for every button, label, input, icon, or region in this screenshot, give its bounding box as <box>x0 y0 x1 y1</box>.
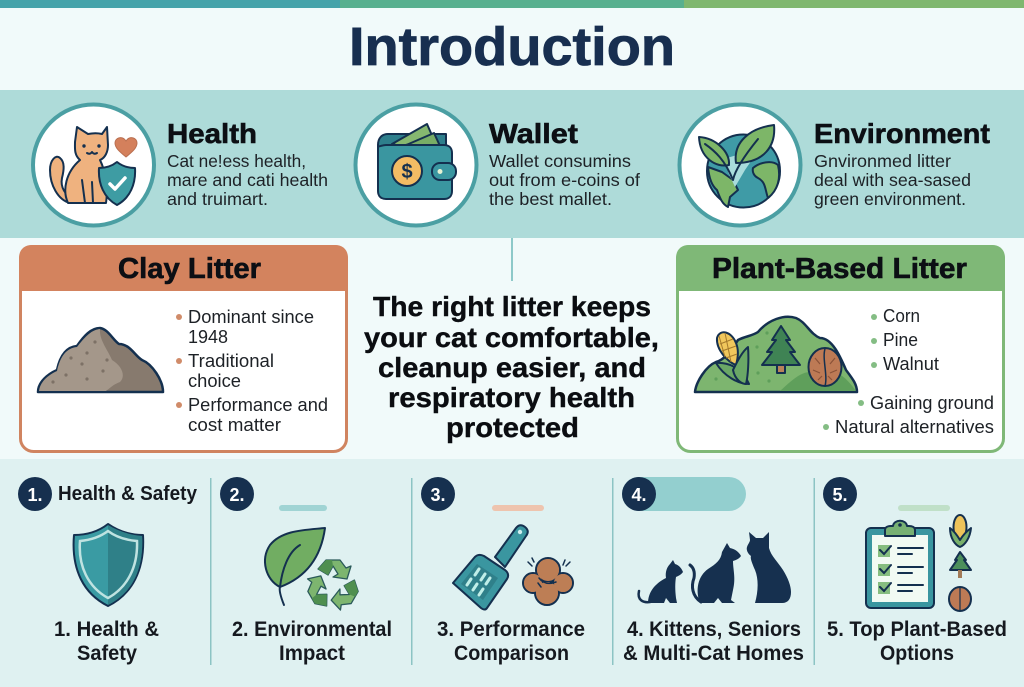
connector line <box>511 238 513 281</box>
criterion 2: environmental impact <box>220 477 392 665</box>
criterion 1: health and safety: Health & Safety <box>58 483 198 505</box>
title: Introduction <box>349 17 675 77</box>
heading: Health: Health <box>167 118 257 149</box>
heading: Environment: Environment <box>814 118 990 149</box>
text: Wallet description: the best mallet. <box>489 189 612 209</box>
text: Health description: and truimart. <box>167 189 268 209</box>
list: clay points: choice <box>188 370 241 391</box>
text: Environment description: deal with sea-sased <box>814 170 971 190</box>
icon: plant mound with corn, pine, walnut <box>695 317 857 392</box>
panel: plant-based litter <box>676 245 1005 452</box>
criterion 4: kittens, seniors and multi-cat homes <box>622 477 804 665</box>
criterion 1: health and safety: 1. <box>27 485 43 505</box>
top colour bar <box>0 0 1024 8</box>
criterion 1: health and safety: Safety <box>77 641 137 665</box>
icon: wallet with coin <box>356 104 476 226</box>
criterion 3: performance comparison <box>421 477 585 665</box>
criterion 2: environmental impact: Impact <box>279 641 345 665</box>
panel: three concerns band <box>0 90 1024 238</box>
callout: central message: respiratory health <box>388 382 635 413</box>
heading: Plant-Based Litter: Plant-Based Litter <box>712 253 967 285</box>
list: clay points: Performance and <box>188 394 328 415</box>
criterion 3: performance comparison: 3. <box>430 485 446 505</box>
criterion 5: top plant-based options: 5. Top Plant-Based <box>827 617 1007 641</box>
text: Environment description: Gnvironmed litter <box>814 151 951 171</box>
text: Health description: mare and cati health <box>167 170 328 190</box>
text: Wallet description <box>489 151 640 209</box>
criterion 2: environmental impact: 2. Environmental <box>232 617 392 641</box>
criterion 1: health and safety <box>18 477 198 665</box>
criterion 1: health and safety: 1. Health & <box>54 617 159 641</box>
callout: central message: cleanup easier, and <box>378 352 646 383</box>
text: Wallet description: out from e-coins of <box>489 170 640 190</box>
text: Environment description <box>814 151 971 209</box>
text: Health description: Cat ne!ess health, <box>167 151 306 171</box>
criterion 4: kittens, seniors and multi-cat homes: & Multi-Cat Homes <box>623 641 804 665</box>
list: plant points: Pine <box>883 329 918 350</box>
criterion 5: top plant-based options <box>823 477 1007 665</box>
list: plant points: Gaining ground <box>870 392 994 413</box>
list: clay points: 1948 <box>188 326 228 347</box>
panel: five criteria <box>0 459 1024 687</box>
list: clay points: Dominant since <box>188 306 314 327</box>
panel: clay litter <box>19 245 348 452</box>
callout: central message <box>364 291 659 443</box>
criterion 3: performance comparison: Comparison <box>454 641 569 665</box>
list: plant points <box>823 305 994 437</box>
criterion 2: environmental impact: 2. <box>229 485 245 505</box>
heading: Wallet: Wallet <box>489 118 578 149</box>
text: Environment description: green environment. <box>814 189 966 209</box>
criterion 3: performance comparison: 3. Performance <box>437 617 585 641</box>
criterion 5: top plant-based options: Options <box>880 641 954 665</box>
text: Health description <box>167 151 328 209</box>
list: plant points: Natural alternatives <box>835 416 994 437</box>
callout: central message: The right litter keeps <box>373 291 651 322</box>
criterion 5: top plant-based options: 5. <box>832 485 848 505</box>
list: plant points: Walnut <box>883 353 939 374</box>
icon: wallet with coin: $ <box>401 161 413 183</box>
text: Wallet description: Wallet consumins <box>489 151 631 171</box>
list: clay points: Traditional <box>188 350 274 371</box>
icon: globe with leaves <box>680 104 800 226</box>
icon: cat with heart and shield <box>33 104 154 226</box>
list: plant points: Corn <box>883 305 920 326</box>
heading: Clay Litter: Clay Litter <box>118 253 261 285</box>
icon: clay mound <box>38 328 163 392</box>
list: clay points: cost matter <box>188 414 281 435</box>
callout: central message: protected <box>446 412 579 443</box>
criterion 4: kittens, seniors and multi-cat homes: 4. <box>631 485 647 505</box>
list: clay points <box>176 306 328 435</box>
criterion 4: kittens, seniors and multi-cat homes: 4. Kittens, Seniors <box>627 617 801 641</box>
callout: central message: your cat comfortable, <box>364 322 659 353</box>
